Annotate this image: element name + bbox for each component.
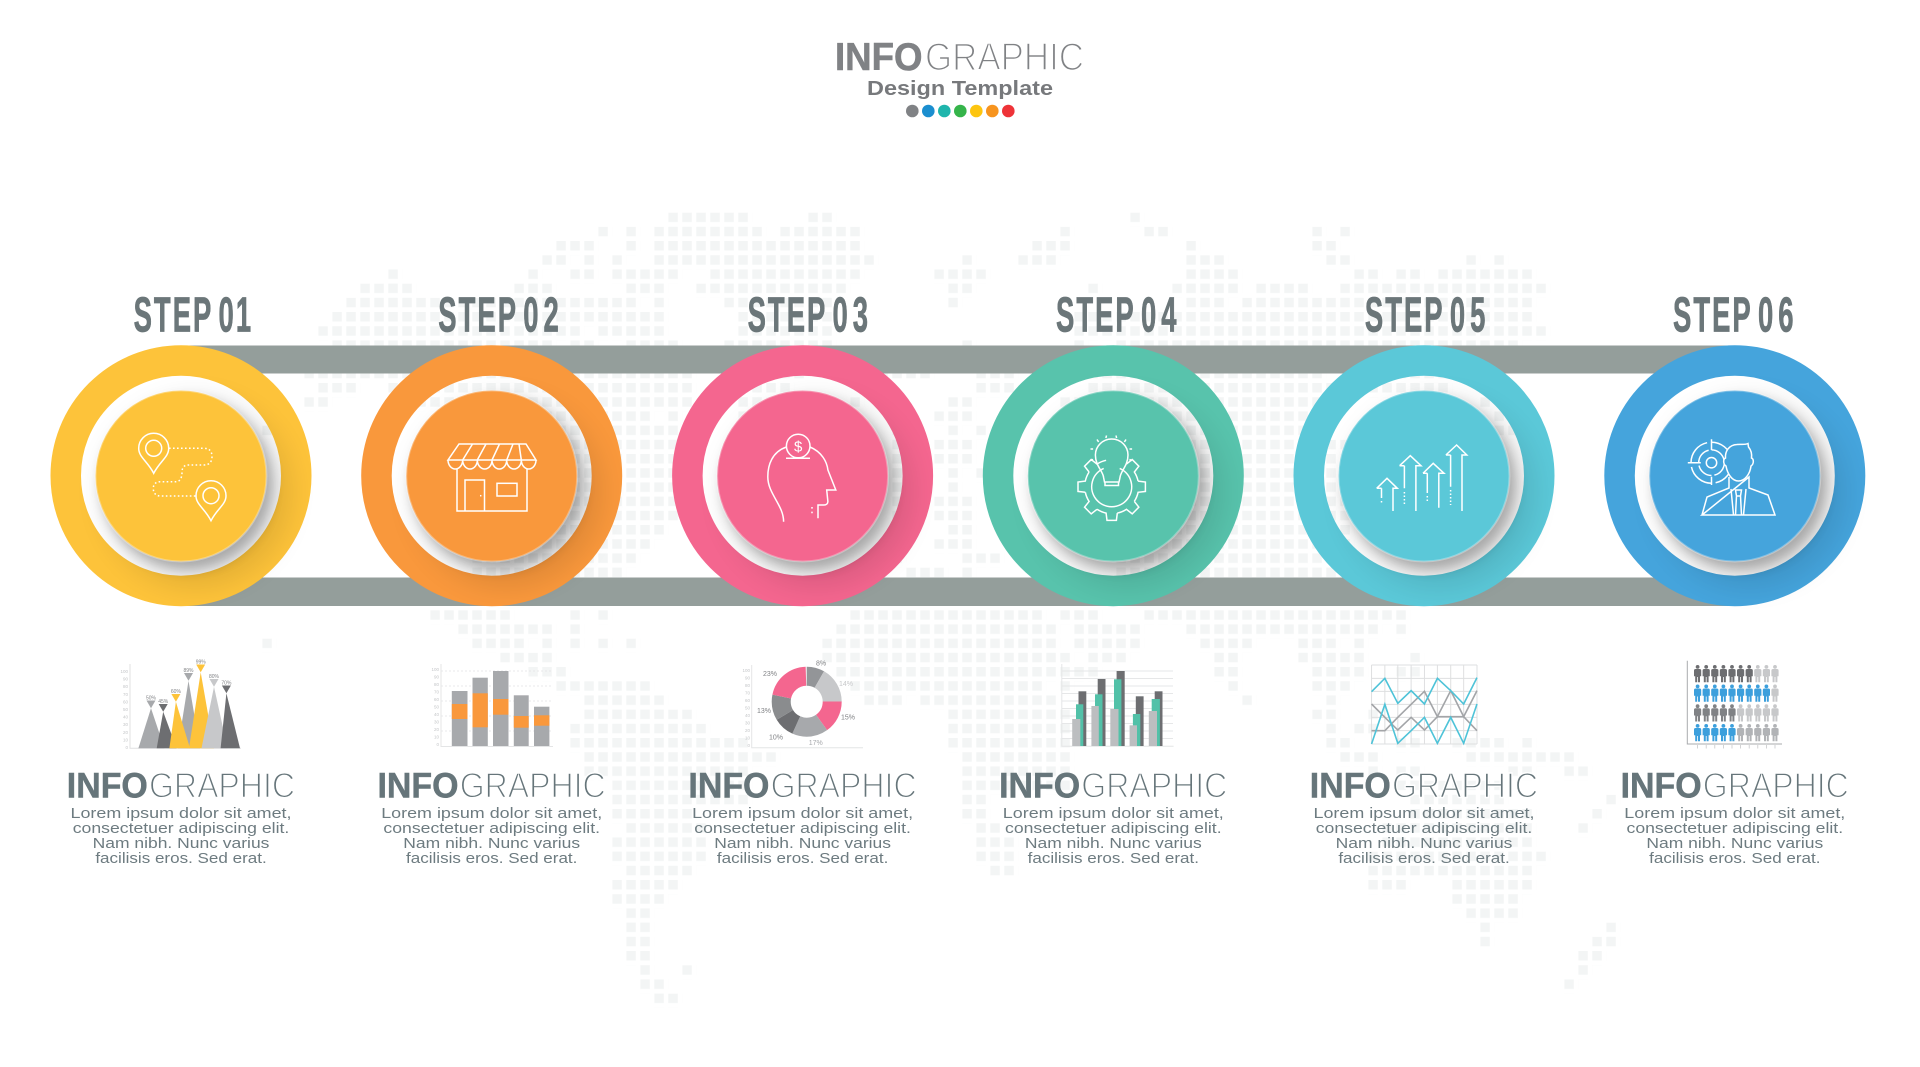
description: consectetuer adipiscing elit. bbox=[1316, 820, 1532, 837]
chart: step 01 mountain chart: 45% bbox=[158, 699, 169, 705]
step headings bbox=[134, 288, 1798, 342]
description: Nam nibh. Nunc varius bbox=[714, 835, 891, 852]
chart: step 03 donut: 60 bbox=[745, 698, 750, 703]
chart: step 03 donut: 20 bbox=[745, 728, 750, 733]
chart: step 02 stacked bars: 50 bbox=[434, 704, 439, 710]
title: INFOGRAPHIC: GRAPHIC bbox=[925, 36, 1084, 79]
circle: step 01 bbox=[66, 360, 296, 591]
chart: step 06 people pictogram bbox=[1687, 661, 1782, 748]
chart: step 02 stacked bars: 70 bbox=[434, 690, 439, 694]
chart: step 01 mountain chart: 0 bbox=[125, 745, 128, 750]
heading: GRAPHIC bbox=[771, 766, 917, 805]
heading: GRAPHIC bbox=[460, 766, 606, 805]
description: Lorem ipsum dolor sit amet, bbox=[1624, 805, 1845, 822]
chart: step 02 stacked bars bbox=[431, 664, 553, 747]
title: INFOGRAPHIC bbox=[835, 36, 1084, 79]
description: facilisis eros. Sed erat. bbox=[717, 850, 888, 867]
chart: step 04 grouped bars bbox=[1062, 664, 1174, 746]
chart: step 03 donut: 13% bbox=[757, 708, 771, 715]
chart: step 03 donut bbox=[742, 660, 863, 748]
chart: step 03 donut: 14% bbox=[839, 681, 853, 688]
chart: step 01 mountain chart: 89% bbox=[183, 668, 194, 674]
description bbox=[692, 805, 913, 867]
heading: INFO bbox=[999, 766, 1080, 805]
description: Lorem ipsum dolor sit amet, bbox=[1003, 805, 1224, 822]
heading: GRAPHIC bbox=[1703, 766, 1849, 805]
chart: step 02 stacked bars: 80 bbox=[434, 682, 439, 687]
text block: step 05 bbox=[1310, 766, 1538, 867]
description: Lorem ipsum dolor sit amet, bbox=[692, 805, 913, 822]
chart: step 03 donut: 17% bbox=[809, 740, 823, 747]
circle: step 02 bbox=[376, 360, 607, 591]
heading: INFO bbox=[67, 766, 148, 805]
icon: businessman with target bbox=[1688, 439, 1775, 515]
chart: step 01 mountain chart: 80 bbox=[123, 684, 128, 689]
heading: GRAPHIC bbox=[1081, 766, 1227, 805]
chart: step 02 stacked bars: 100 bbox=[431, 667, 439, 672]
chart: step 03 donut: 30 bbox=[745, 720, 750, 726]
circle: step 06 bbox=[1620, 360, 1850, 591]
chart: step 03 donut: 15% bbox=[841, 714, 855, 722]
heading: INFO bbox=[688, 766, 769, 805]
circle: step 03 bbox=[687, 360, 918, 591]
chart: step 01 mountain chart: 100 bbox=[120, 669, 128, 674]
heading: step 03: STEP 03 bbox=[748, 288, 873, 342]
chart: step 02 stacked bars: 60 bbox=[434, 697, 439, 702]
chart: step 03 donut: 8% bbox=[816, 660, 826, 668]
chart: step 01 mountain chart: 80% bbox=[209, 674, 220, 680]
icon: head with dollar coin bbox=[768, 434, 836, 522]
chart: step 03 donut: 70 bbox=[745, 690, 750, 696]
description: consectetuer adipiscing elit. bbox=[383, 820, 600, 837]
icon: head with dollar coin: $ bbox=[794, 438, 803, 456]
chart: step 01 mountain chart: 50 bbox=[123, 707, 128, 712]
description bbox=[381, 805, 602, 867]
colour dots bbox=[906, 105, 1015, 117]
chart: step 01 mountain chart: 90 bbox=[123, 677, 128, 682]
description bbox=[1624, 805, 1845, 867]
chart: step 01 mountain chart: 40 bbox=[123, 715, 128, 720]
chart: step 03 donut: 0 bbox=[747, 743, 750, 748]
description: Lorem ipsum dolor sit amet, bbox=[1314, 805, 1534, 822]
chart: step 03 donut: 100 bbox=[742, 668, 750, 673]
text block: step 03 bbox=[688, 766, 917, 867]
heading bbox=[999, 766, 1227, 805]
icon: route between map pins bbox=[139, 433, 226, 521]
heading: GRAPHIC bbox=[1392, 766, 1538, 805]
heading: step 02: STEP 02 bbox=[438, 288, 564, 342]
description: consectetuer adipiscing elit. bbox=[1627, 820, 1843, 837]
description: Lorem ipsum dolor sit amet, bbox=[381, 805, 602, 822]
chart: step 03 donut: 80 bbox=[745, 683, 750, 688]
description: facilisis eros. Sed erat. bbox=[1338, 850, 1510, 867]
chart: step 01 mountain chart: 70 bbox=[123, 692, 128, 697]
description: consectetuer adipiscing elit. bbox=[73, 820, 289, 837]
heading: step 05: STEP 05 bbox=[1365, 288, 1490, 342]
heading: INFO bbox=[1310, 766, 1391, 805]
chart: step 01 mountain chart: 60% bbox=[171, 689, 181, 695]
description: consectetuer adipiscing elit. bbox=[694, 820, 911, 837]
connector bars bbox=[181, 346, 1735, 606]
text block: step 02 bbox=[378, 766, 606, 867]
chart: step 02 stacked bars: 20 bbox=[434, 727, 439, 732]
chart: step 02 stacked bars: 30 bbox=[434, 720, 439, 724]
description: Lorem ipsum dolor sit amet, bbox=[70, 805, 292, 822]
subtitle: Design Template bbox=[867, 77, 1053, 100]
description bbox=[70, 805, 292, 867]
chart: step 03 donut: 23% bbox=[763, 671, 777, 678]
heading: step 06: STEP 06 bbox=[1673, 288, 1798, 342]
description bbox=[1314, 805, 1534, 867]
text block: step 06 bbox=[1621, 766, 1849, 867]
chart: step 02 stacked bars: 0 bbox=[436, 742, 439, 747]
chart: step 03 donut: 10% bbox=[769, 734, 783, 742]
description: facilisis eros. Sed erat. bbox=[1649, 850, 1821, 867]
title block bbox=[835, 36, 1084, 117]
description: facilisis eros. Sed erat. bbox=[406, 850, 577, 867]
chart: step 01 mountain chart: 20 bbox=[123, 730, 128, 735]
chart: step 02 stacked bars: 40 bbox=[434, 712, 439, 717]
chart: step 01 mountain chart: 50% bbox=[146, 696, 157, 702]
heading bbox=[1621, 766, 1849, 805]
icon: light bulb and gear bbox=[1077, 436, 1146, 521]
description: facilisis eros. Sed erat. bbox=[95, 850, 267, 867]
chart: step 01 mountain chart: 30 bbox=[123, 722, 128, 727]
icon: rising arrows bbox=[1377, 445, 1467, 511]
description: Nam nibh. Nunc varius bbox=[93, 835, 269, 852]
background: dotted world map bbox=[262, 220, 1620, 1001]
chart: step 03 donut: 90 bbox=[745, 676, 750, 680]
icon: shop bbox=[448, 444, 536, 511]
heading bbox=[1310, 766, 1538, 805]
circle: step 05 bbox=[1309, 360, 1539, 591]
description: Nam nibh. Nunc varius bbox=[1336, 835, 1512, 852]
description: Nam nibh. Nunc varius bbox=[1025, 835, 1202, 852]
chart: step 05 line chart bbox=[1372, 665, 1477, 744]
chart: step 03 donut: 10 bbox=[745, 736, 750, 740]
description bbox=[1003, 805, 1224, 867]
chart: step 01 mountain chart: 70% bbox=[221, 680, 232, 686]
description: Nam nibh. Nunc varius bbox=[1646, 835, 1823, 852]
chart: step 03 donut: 40 bbox=[745, 713, 750, 718]
description: consectetuer adipiscing elit. bbox=[1005, 820, 1222, 837]
chart: step 02 stacked bars: 10 bbox=[434, 734, 439, 740]
heading bbox=[688, 766, 917, 805]
heading: step 04: STEP 04 bbox=[1056, 288, 1181, 342]
chart: step 02 stacked bars: 90 bbox=[434, 674, 439, 680]
chart: step 01 mountain chart: 99% bbox=[196, 660, 206, 666]
description: Nam nibh. Nunc varius bbox=[403, 835, 580, 852]
heading bbox=[378, 766, 606, 805]
description: facilisis eros. Sed erat. bbox=[1028, 850, 1199, 867]
heading: INFO bbox=[378, 766, 459, 805]
chart: step 01 mountain chart bbox=[120, 660, 241, 750]
chart: step 03 donut: 50 bbox=[745, 706, 750, 710]
heading: INFO bbox=[1621, 766, 1702, 805]
heading: step 01: STEP 01 bbox=[134, 288, 253, 342]
chart: step 01 mountain chart: 10 bbox=[123, 737, 128, 742]
text block: step 01 bbox=[67, 766, 295, 867]
text block: step 04 bbox=[999, 766, 1227, 867]
heading: GRAPHIC bbox=[149, 766, 295, 805]
heading bbox=[67, 766, 295, 805]
circle: step 04 bbox=[998, 360, 1229, 591]
chart: step 01 mountain chart: 60 bbox=[123, 699, 128, 704]
title: INFOGRAPHIC: INFO bbox=[835, 36, 922, 79]
